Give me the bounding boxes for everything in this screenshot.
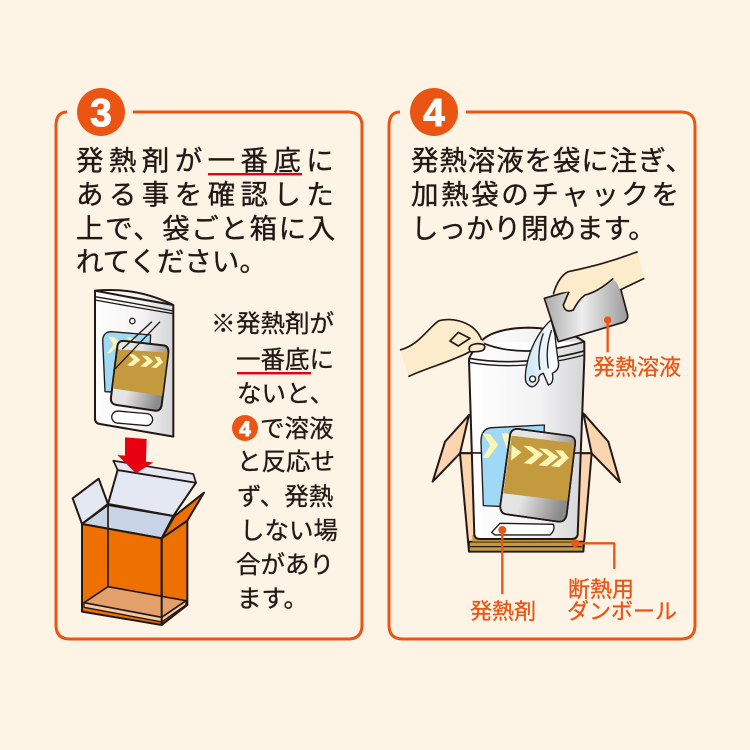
gold heating sachet <box>500 429 575 522</box>
label: insulating cardboard: 断熱用 <box>568 577 634 602</box>
small badge 4: 4 <box>239 418 251 441</box>
label: insulating cardboard: ダンボール <box>567 599 677 624</box>
step 4 instruction text <box>411 145 694 244</box>
note text: で溶液 <box>260 415 334 443</box>
step 3 number badge: 3 <box>90 92 112 135</box>
step 3 instruction text: ある事を確認した <box>76 179 339 210</box>
left hand <box>400 320 485 377</box>
step 4 instruction text: しっかり閉めます。 <box>411 213 656 244</box>
small badge 4 <box>232 415 258 441</box>
heat pouch bag <box>469 328 584 539</box>
note text: 合があり <box>236 551 334 579</box>
bag <box>95 290 173 437</box>
blue sachet <box>481 425 544 508</box>
step 4 instruction text: 発熱溶液を袋に注ぎ、 <box>411 145 694 176</box>
box back flaps <box>73 461 204 538</box>
note text: 発熱剤が <box>236 310 334 338</box>
label: heat agent: 発熱剤 <box>470 599 536 624</box>
box flaps and walls <box>433 413 620 552</box>
box body <box>82 505 187 625</box>
right hand <box>553 252 644 311</box>
note text: ないと、 <box>237 381 334 408</box>
step 3 instruction text <box>76 145 339 277</box>
panel: step 4 <box>389 88 695 639</box>
step 4 number badge: 4 <box>423 92 445 135</box>
step 3 instruction text: 上で、袋ごと箱に入 <box>76 213 337 244</box>
note text: しない場 <box>240 517 338 545</box>
note text: ※ <box>211 311 236 338</box>
leader lines <box>498 316 614 594</box>
step 4 instruction text: 加熱袋のチャックを <box>411 179 682 210</box>
illustration: pouring solution into bag in box <box>400 252 644 594</box>
foil pouch <box>544 278 628 342</box>
note text: と反応せ <box>237 449 335 476</box>
liquid stream <box>525 320 559 387</box>
step 3 instruction text: 発熱剤が一番底に <box>76 145 339 176</box>
step 4 number badge <box>410 88 458 136</box>
illustration: bag dropped into box <box>73 290 204 625</box>
step 3 number badge <box>77 88 125 136</box>
note text: ます。 <box>237 586 308 613</box>
red arrow <box>117 437 153 473</box>
note text: ず、発熱 <box>237 483 333 511</box>
horizontal box edge <box>460 450 592 455</box>
label: heat solution: 発熱溶液 <box>593 355 681 380</box>
label: insulating cardboard <box>567 577 677 624</box>
heat agent window <box>492 523 554 535</box>
panel: step 3 <box>56 88 362 639</box>
note text: 一番底に <box>236 346 334 374</box>
step 3 instruction text: れてください。 <box>76 246 267 277</box>
note text <box>211 310 338 613</box>
